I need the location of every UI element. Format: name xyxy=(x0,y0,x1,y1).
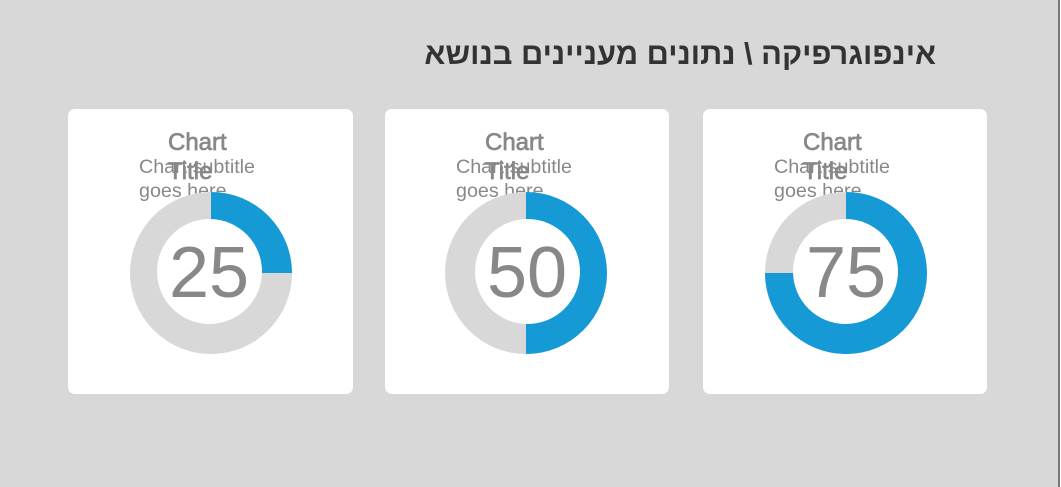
chart title xyxy=(168,129,227,185)
chart subtitle: Chart subtitle xyxy=(456,156,572,178)
chart title: Title xyxy=(168,158,212,185)
donut: 50 xyxy=(445,192,607,354)
chart subtitle: goes here xyxy=(456,180,544,202)
chart subtitle xyxy=(774,156,890,202)
chart title: Chart xyxy=(168,129,227,156)
donut: 50: 50 xyxy=(487,233,567,313)
chart title: Chart xyxy=(485,129,544,156)
panel: chart 75 xyxy=(703,109,987,394)
chart title xyxy=(485,129,544,185)
chart subtitle xyxy=(456,156,572,202)
chart subtitle: goes here xyxy=(139,180,227,202)
donut: 25: 25 xyxy=(169,233,249,313)
chart title: Title xyxy=(485,158,529,185)
chart title: Title xyxy=(803,158,847,185)
title: אינפוגרפיקה \ נתונים מעניינים בנושא xyxy=(424,36,936,71)
chart subtitle: Chart subtitle xyxy=(139,156,255,178)
donut: 75 xyxy=(765,192,927,354)
chart title: Chart xyxy=(803,129,862,156)
chart subtitle: Chart subtitle xyxy=(774,156,890,178)
donut: 75: 75 xyxy=(806,233,886,313)
panel: chart 25 xyxy=(68,109,353,394)
panel: chart 50 xyxy=(385,109,669,394)
donut: 25 xyxy=(130,192,292,354)
chart title xyxy=(803,129,862,185)
chart subtitle: goes here xyxy=(774,180,862,202)
chart subtitle xyxy=(139,156,255,202)
